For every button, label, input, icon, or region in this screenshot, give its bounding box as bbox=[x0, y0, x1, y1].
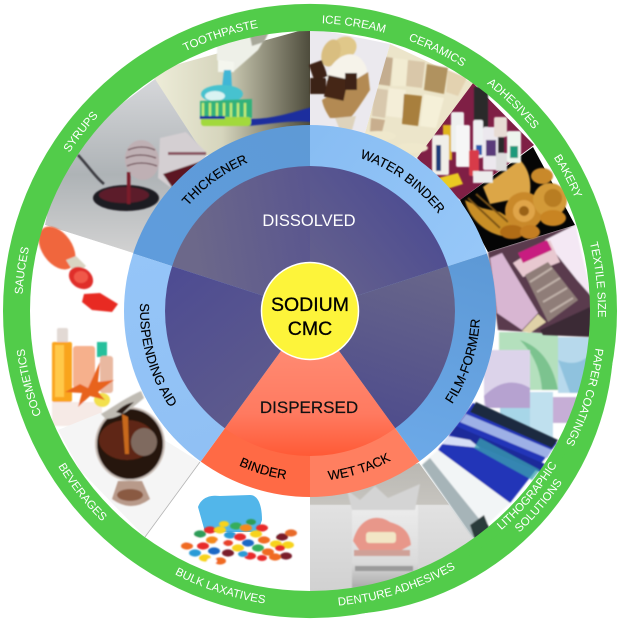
photo: bulk laxatives bbox=[181, 495, 297, 566]
photo: textile size bbox=[488, 225, 600, 337]
center circle bbox=[262, 262, 358, 360]
photo: beverages bbox=[58, 391, 200, 537]
photo: denture adhesives bbox=[310, 463, 473, 600]
segment: water binder bbox=[310, 125, 487, 311]
wedge: thickener bbox=[172, 166, 310, 311]
segment: wet tack bbox=[310, 311, 419, 497]
label: cosmetics: COSMETICS bbox=[16, 349, 40, 416]
label: denture adhesives: DENTURE ADHESIVES bbox=[338, 562, 454, 606]
center title: SODIUM bbox=[271, 294, 349, 316]
segment: thickener bbox=[133, 125, 310, 311]
photo: toothpaste bbox=[150, 28, 312, 156]
wedge: water binder bbox=[310, 166, 448, 311]
inner dissolved and dispersed wedges bbox=[165, 166, 455, 456]
photo: ice cream bbox=[309, 28, 390, 133]
photo: adhesives bbox=[417, 83, 534, 200]
label: beverages: BEVERAGES bbox=[58, 462, 106, 520]
label: bakery: BAKERY bbox=[554, 154, 582, 196]
photo: ceramics bbox=[360, 44, 473, 158]
photo: cosmetics bbox=[52, 328, 114, 426]
photo: lithographic solutions bbox=[422, 402, 558, 540]
label: film-former: FILM-FORMER bbox=[445, 320, 480, 404]
blue and orange function ring bbox=[124, 125, 496, 497]
label: thickener: THICKENER bbox=[181, 155, 248, 204]
label: adhesives: ADHESIVES bbox=[486, 80, 538, 128]
label: suspending aid: SUSPENDING AID bbox=[140, 304, 176, 406]
label: ice cream: ICE CREAM bbox=[322, 15, 386, 33]
segment: suspending aid bbox=[124, 254, 310, 462]
label: binder: BINDER bbox=[240, 458, 286, 480]
photo: sauces bbox=[38, 225, 132, 313]
segment: film-former bbox=[310, 254, 496, 462]
wedge: suspending aid bbox=[165, 266, 310, 428]
photo: divider line bbox=[145, 462, 200, 537]
label: water binder: WATER BINDER bbox=[362, 149, 444, 214]
function labels bbox=[140, 149, 480, 480]
label: wet tack: WET TACK bbox=[327, 452, 391, 480]
segment: binder bbox=[201, 311, 310, 497]
photo: paper coatings bbox=[483, 331, 589, 438]
heading: dispersed: DISPERSED bbox=[260, 398, 358, 417]
photo: syrups bbox=[45, 79, 206, 253]
label: lithographic: LITHOGRAPHIC bbox=[496, 462, 556, 530]
center title: CMC bbox=[288, 318, 332, 340]
label: sauces: SAUCES bbox=[14, 247, 29, 294]
green ring bulge behind lithographic label bbox=[361, 362, 612, 613]
label: syrups: SYRUPS bbox=[64, 112, 98, 152]
label: bulk laxatives: BULK LAXATIVES bbox=[176, 568, 266, 604]
label: ceramics: CERAMICS bbox=[410, 34, 466, 66]
photo: bakery bbox=[460, 147, 575, 252]
label: paper coatings: PAPER COATINGS bbox=[566, 348, 604, 446]
label: toothpaste: TOOTHPASTE bbox=[182, 20, 258, 50]
label: solutions: SOLUTIONS bbox=[515, 479, 562, 532]
wedge: dispersed bbox=[225, 311, 395, 456]
label: textile size: TEXTILE SIZE bbox=[590, 241, 606, 318]
heading: dissolved: DISSOLVED bbox=[262, 212, 356, 230]
wedge: film-former bbox=[310, 266, 455, 428]
